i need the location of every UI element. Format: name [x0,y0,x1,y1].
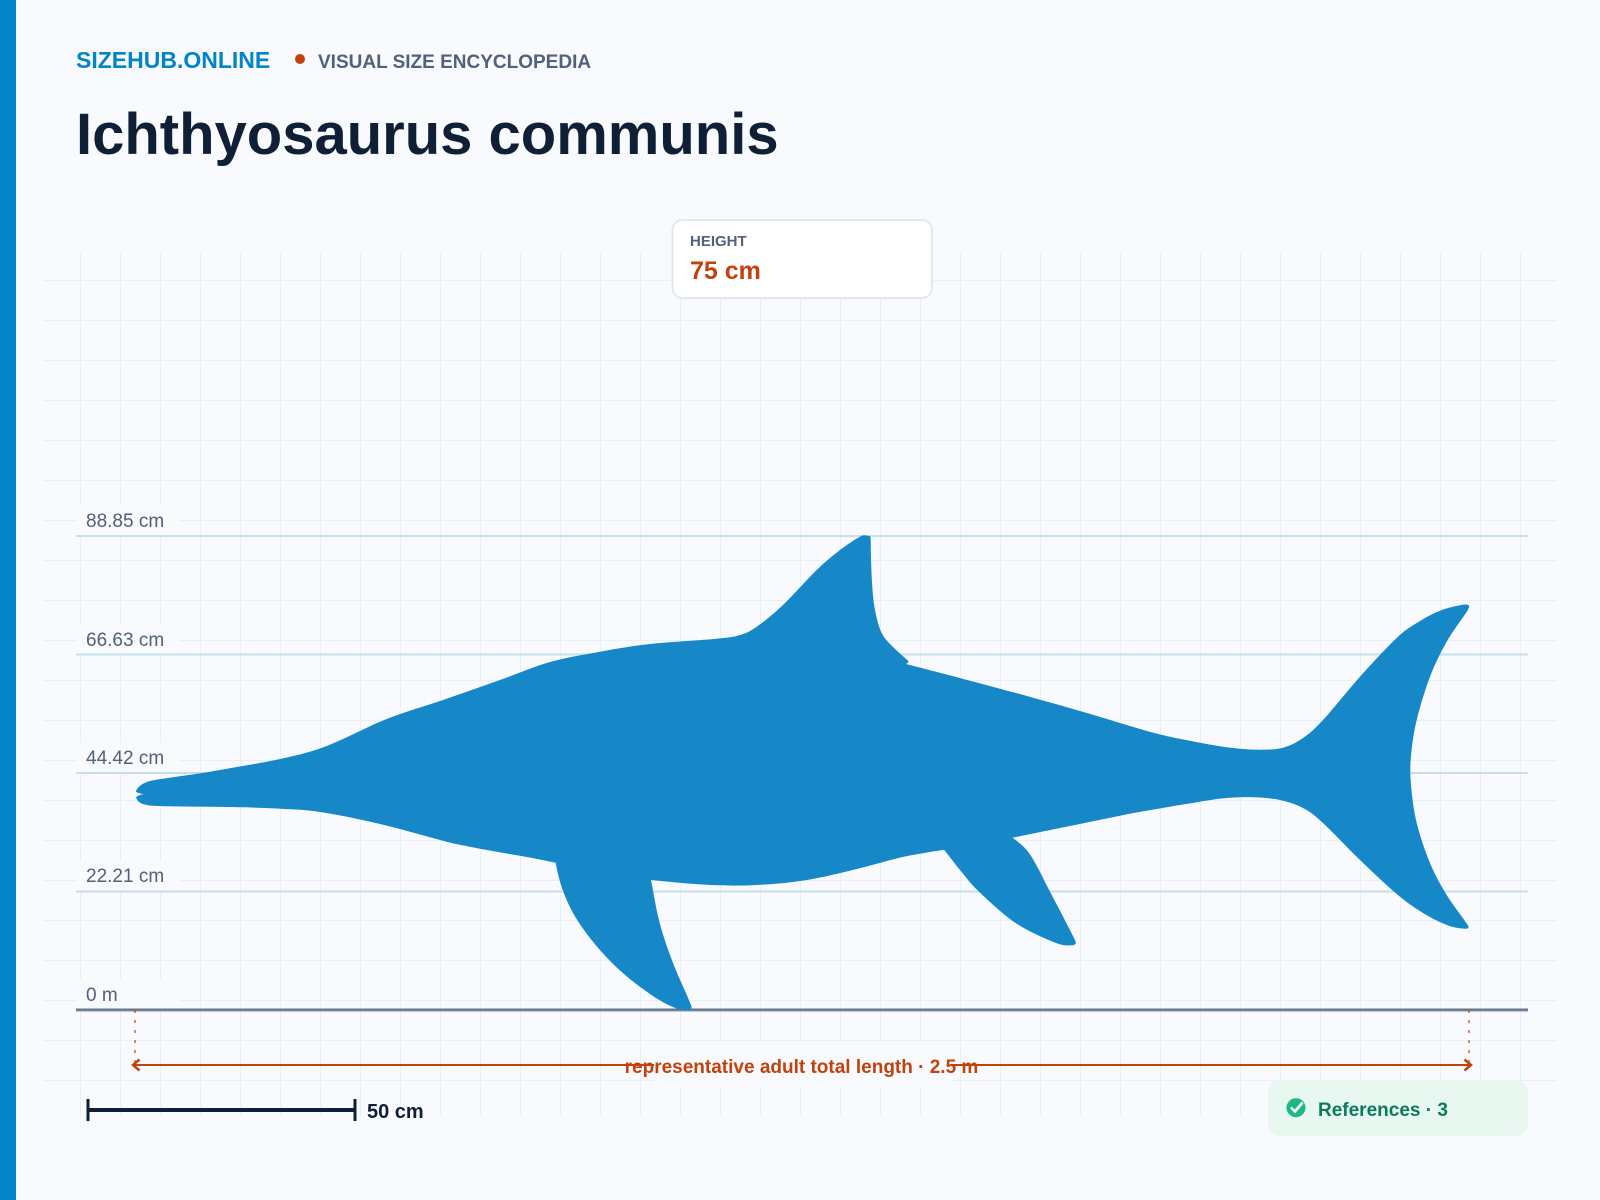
gridline 44.42 cm [76,742,1528,774]
gridline 88.85 cm: 88.85 cm [86,511,164,532]
height value: 75 cm [690,257,761,285]
accent bar [0,0,16,1200]
gridline 22.21 cm: 22.21 cm [86,866,164,887]
tagline: VISUAL SIZE ENCYCLOPEDIA [318,52,591,73]
height label: HEIGHT [690,233,747,250]
title: Ichthyosaurus communis [76,102,779,167]
brand name: SIZEHUB.ONLINE [76,47,270,73]
length dimension arrow [133,1010,1471,1087]
ground line 0 m [76,979,1528,1012]
references text: References · 3 [1318,1100,1448,1121]
references badge [1268,1080,1528,1136]
brand dot [295,54,305,64]
gridline 44.42 cm: 44.42 cm [86,748,164,769]
ichthyosaur silhouette [136,535,1469,1010]
ground line 0 m: 0 m [86,985,118,1006]
gridline 66.63 cm: 66.63 cm [86,630,164,651]
height reference lines with labels [76,505,1528,1012]
background grid [44,252,1556,1116]
scale label: 50 cm [367,1101,424,1123]
height card [672,220,932,298]
gridline 88.85 cm [76,505,1528,537]
gridline 22.21 cm [76,861,1528,892]
length label: representative adult total length · 2.5 m [625,1057,978,1078]
header [76,47,779,167]
gridline 66.63 cm [76,624,1528,656]
icon: check [1286,1098,1306,1117]
